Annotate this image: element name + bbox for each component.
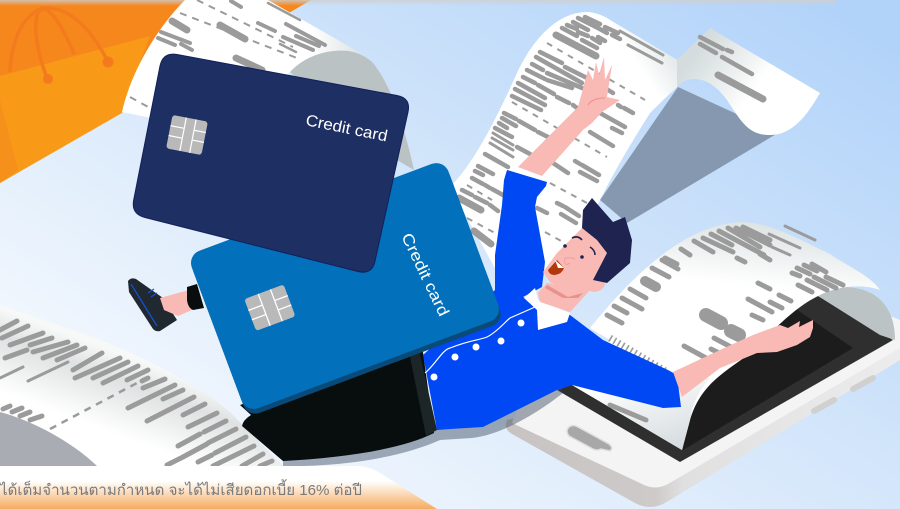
man: neck [538,283,590,312]
receipt: center long [450,12,820,275]
man: belt [409,350,437,436]
phone body side [506,324,900,507]
caption band [0,466,437,509]
phone screen [557,296,893,462]
panel: orange shopping backdrop [0,0,311,183]
phone [506,285,900,507]
card label: Credit card [398,231,452,319]
man: face [543,228,607,298]
man: raised arm skin [518,57,620,176]
man: ankle [160,290,192,316]
top edge blur strip [0,0,835,6]
receipt: over phone [572,222,880,450]
man: sock [187,284,204,310]
phone face [512,285,900,488]
receipt: phone underside [818,287,895,340]
phone side buttons [814,378,873,411]
chip [244,284,295,331]
man: shirt [423,170,681,430]
man: neck skin top [538,283,590,312]
man: body shadow [283,385,563,466]
chip [166,115,208,155]
man: white collar [524,288,570,330]
receipt: top behind card [122,0,414,170]
man: hair [582,198,632,283]
man: stitching and buttons [425,307,535,380]
card label: Credit card [304,112,389,145]
receipt: bottom left [0,305,283,466]
receipt: grey underside [0,412,97,466]
man: mouth [548,260,564,275]
man: trousers [240,345,434,461]
man: shoe [128,278,177,331]
receipt: center shadow [600,87,778,223]
icon: shopping bag handles [10,8,114,84]
man: reaching arm skin [673,320,813,397]
man [128,57,813,466]
man: hand crease [588,98,605,105]
blue credit card [187,159,504,417]
phone home button [567,426,612,451]
caption text: ได้เต็มจำนวนตามกำหนด จะได้ไม่เสียดอกเบี้ย 16% ต่อปี [0,479,362,499]
navy credit card [133,54,409,272]
